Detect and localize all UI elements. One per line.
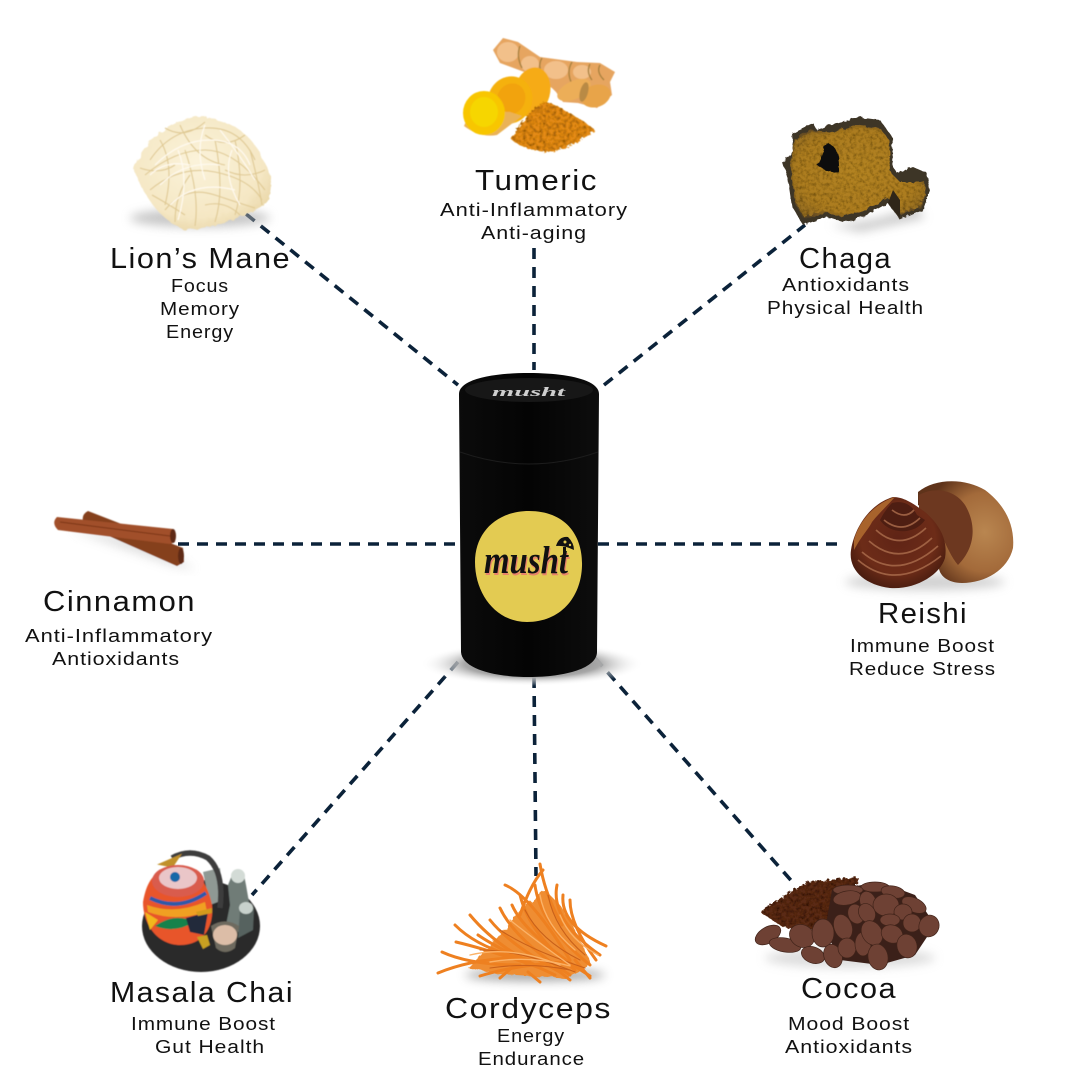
yellow label with logo: musht (485, 541, 570, 584)
heading: Tumeric (475, 165, 598, 197)
benefits (767, 275, 924, 318)
canister lid: musht (492, 384, 566, 399)
ingredient: Chaga (767, 117, 930, 318)
icon: chaga mushroom (783, 117, 930, 232)
icon: lion's mane mushroom (130, 116, 272, 230)
product canister (420, 373, 644, 686)
ingredient: Tumeric (440, 38, 628, 243)
benefits: Immune Boost (850, 636, 995, 656)
benefits: Anti-Inflammatory (25, 626, 213, 646)
benefits: Energy (497, 1026, 565, 1046)
benefits: Antioxidants (785, 1037, 913, 1057)
canister shadow (420, 642, 644, 686)
benefits: Gut Health (155, 1037, 265, 1057)
benefits: Antioxidants (52, 649, 180, 669)
icon: cordyceps strands (438, 864, 606, 982)
benefits: Immune Boost (131, 1014, 276, 1034)
benefits: Mood Boost (788, 1014, 910, 1034)
ingredient: Cordyceps (438, 864, 612, 1069)
benefits: Memory (160, 299, 240, 319)
benefits: Physical Health (767, 298, 924, 318)
heading: Cocoa (801, 973, 897, 1005)
canister body (459, 373, 599, 677)
benefits (440, 200, 628, 243)
heading: Lion’s Mane (110, 243, 291, 275)
benefits: Focus (171, 276, 229, 296)
benefits: Antioxidants (782, 275, 910, 295)
heading: Reishi (878, 598, 968, 630)
ingredient: Lion's Mane (110, 116, 291, 342)
yellow label with logo: musht (484, 539, 569, 582)
benefits: Anti-Inflammatory (440, 200, 628, 220)
icon: cinnamon sticks (54, 511, 195, 570)
icon: cocoa powder and beans (752, 877, 942, 972)
benefits (849, 636, 996, 679)
benefits (160, 276, 240, 342)
ingredient: Masala Chai (110, 853, 294, 1057)
benefits: Anti-aging (481, 223, 587, 243)
icon: turmeric root and powder (463, 38, 615, 152)
benefits: Energy (166, 322, 234, 342)
dashed connector lines (178, 214, 845, 895)
heading: Cordyceps (445, 993, 612, 1025)
benefits: Endurance (478, 1049, 585, 1069)
benefits (785, 1014, 913, 1057)
heading: Cinnamon (43, 586, 196, 618)
ingredient: Reishi (845, 481, 1013, 679)
icon: reishi mushrooms (845, 481, 1013, 590)
benefits (131, 1014, 276, 1057)
benefits (478, 1026, 585, 1069)
ingredient: Cocoa (752, 877, 942, 1057)
canister lid (460, 378, 598, 464)
heading: Chaga (799, 243, 892, 275)
ingredient: Cinnamon (25, 511, 213, 669)
heading: Masala Chai (110, 977, 294, 1009)
yellow label with logo (475, 511, 582, 622)
benefits (25, 626, 213, 669)
benefits: Reduce Stress (849, 659, 996, 679)
icon: painted kettle with chai on tray (142, 853, 260, 972)
